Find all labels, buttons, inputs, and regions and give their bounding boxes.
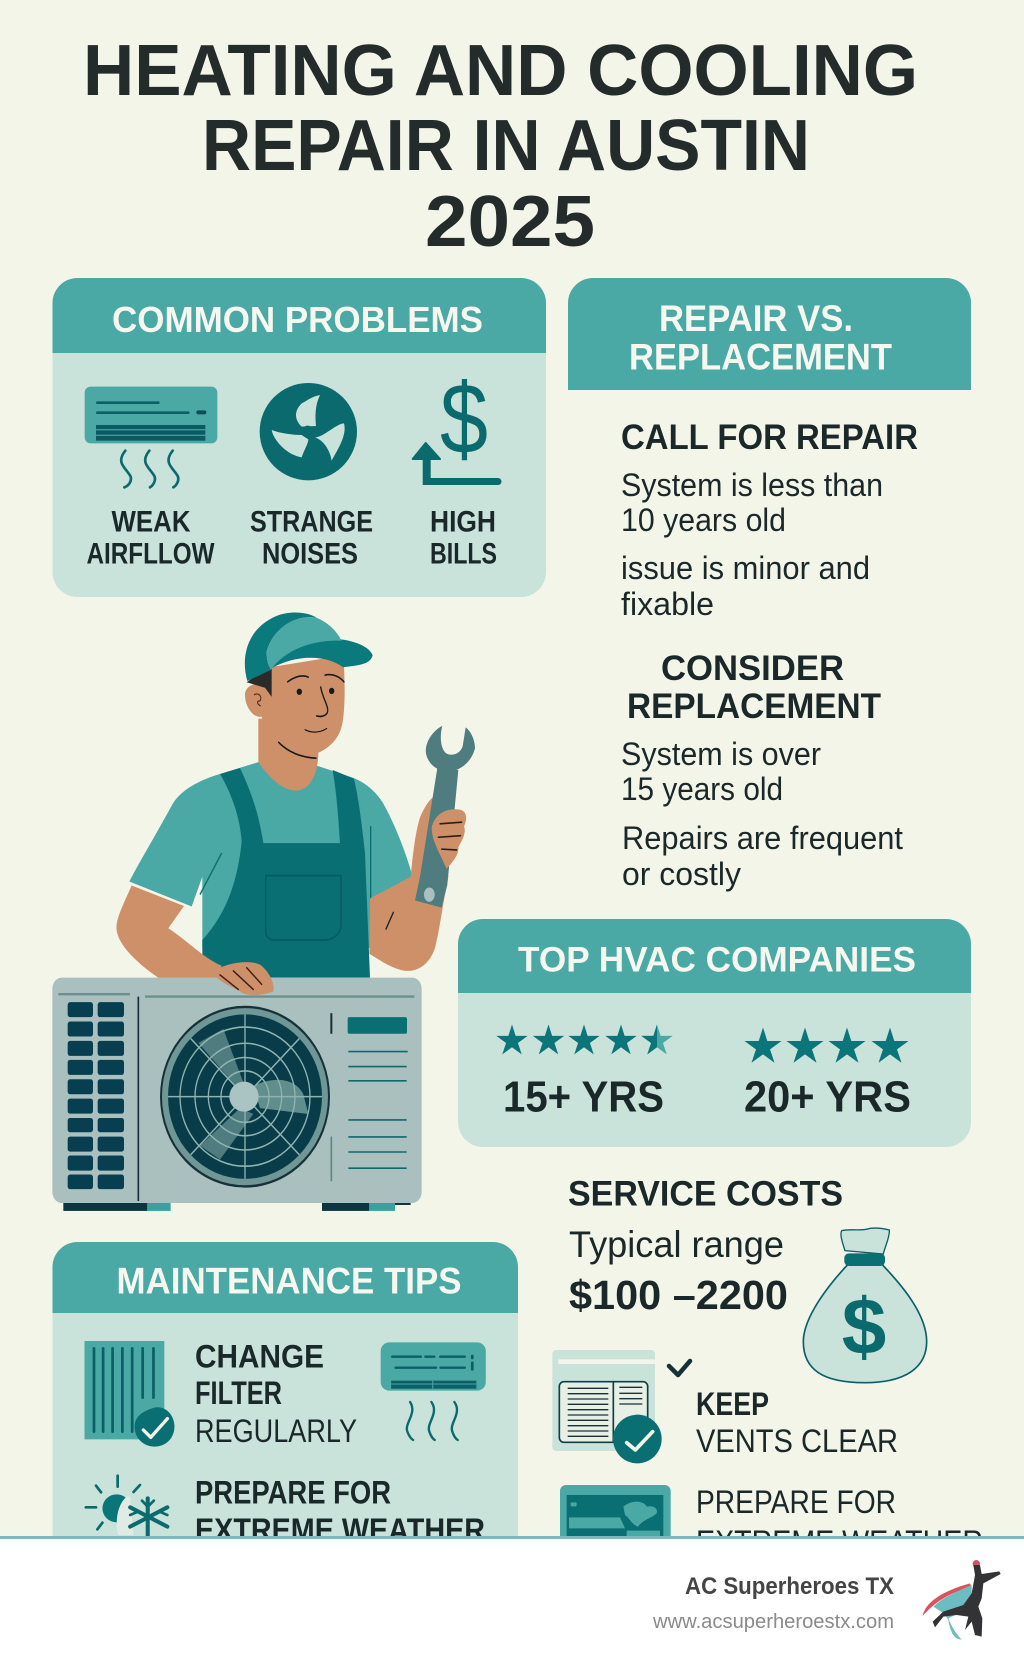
- icon: weather map card: [560, 1485, 671, 1562]
- panel: top hvac companies: [458, 919, 971, 1147]
- label: 20+ yrs: 20+ YRS: [744, 1072, 911, 1122]
- cap: [245, 612, 373, 681]
- panel: maintenance tips: [52, 1242, 518, 1560]
- footer website: www.acsuperheroestx.com: [652, 1611, 894, 1633]
- text block: consider replacement: or costly: [622, 856, 741, 892]
- heading: repair vs replacement: [629, 297, 892, 378]
- icon: wall AC with airflow: [381, 1342, 486, 1440]
- text block: prepare for extreme weather (right): PREPARE FOR: [696, 1484, 896, 1520]
- outdoor unit feet: [63, 1201, 411, 1211]
- wrench: [415, 726, 475, 908]
- label: high bills: HIGH: [430, 506, 496, 538]
- left arm: [116, 885, 222, 979]
- footer: [0, 1536, 1024, 1666]
- panel: common problems: [52, 278, 546, 597]
- text block: call for repair: 10 years old: [621, 502, 786, 538]
- text block: call for repair: CALL FOR REPAIR: [621, 418, 918, 457]
- text block: consider replacement: REPLACEMENT: [627, 687, 881, 726]
- text block: prepare for extreme weather (right): EXTREME WEATHER: [696, 1524, 983, 1560]
- heading: maintenance tips: MAINTENANCE TIPS: [116, 1260, 462, 1302]
- text block: keep vents clear: [696, 1386, 898, 1459]
- text block: service costs: [568, 1174, 843, 1318]
- hair: [247, 664, 272, 697]
- text block: change filter regularly: REGULARLY: [195, 1413, 357, 1449]
- heading: common problems: COMMON PROBLEMS: [112, 299, 483, 340]
- fingers: [432, 809, 466, 869]
- ear line: [254, 694, 261, 706]
- hand resting on unit: [213, 962, 274, 995]
- text block: keep vents clear: VENTS CLEAR: [696, 1423, 898, 1459]
- label: strange noises: [250, 506, 373, 570]
- illustration: technician with wrench: [52, 612, 475, 1211]
- overalls: [202, 768, 370, 978]
- heading: repair vs replacement: REPAIR VS.: [659, 297, 853, 339]
- unit fan: [160, 1006, 330, 1188]
- panel: repair vs replacement: [568, 278, 971, 390]
- right arm and hand: [369, 796, 448, 971]
- text block: call for repair: fixable: [621, 586, 714, 622]
- icon: vents checklist: [552, 1350, 662, 1463]
- icon: dollar with rising arrow: $: [440, 363, 488, 475]
- label: high bills: BILLS: [430, 538, 497, 570]
- face details: [279, 675, 344, 758]
- label: strange noises: NOISES: [262, 538, 358, 570]
- title: REPAIR IN AUSTIN: [202, 106, 810, 186]
- head: [245, 655, 345, 756]
- label: weak airflow: AIRFLLOW: [86, 538, 215, 570]
- overalls pocket: [266, 876, 341, 940]
- heading: repair vs replacement: REPLACEMENT: [629, 336, 892, 378]
- heading: top hvac companies: TOP HVAC COMPANIES: [518, 940, 916, 980]
- neck: [258, 719, 318, 791]
- label: high bills: [430, 506, 497, 570]
- text block: consider replacement: Repairs are frequent: [622, 820, 903, 856]
- label: weak airflow: WEAK: [112, 506, 191, 538]
- icon: air filter with check: [85, 1341, 174, 1447]
- text block: keep vents clear: KEEP: [696, 1386, 769, 1422]
- title: 2025: [425, 182, 595, 262]
- text block: service costs: SERVICE COSTS: [568, 1174, 843, 1214]
- text block: prepare for extreme weather (left): PREPARE FOR: [195, 1474, 391, 1510]
- text block: service costs: Typical range: [569, 1224, 784, 1265]
- footer brand name: AC Superheroes TX: [685, 1573, 894, 1600]
- unit control panel and grille lines: [331, 1013, 408, 1181]
- text block: call for repair: [621, 418, 918, 622]
- title: HEATING AND COOLING: [83, 31, 918, 111]
- text block: prepare for extreme weather (right): [696, 1484, 983, 1560]
- label: strange noises: STRANGE: [250, 506, 373, 538]
- icon: sun and snowflake: [86, 1476, 167, 1540]
- text block: change filter regularly: CHANGE: [195, 1338, 324, 1374]
- text block: consider replacement: System is over: [621, 736, 821, 772]
- text block: service costs: $100 –2200: [569, 1272, 788, 1318]
- text block: call for repair: System is less than: [621, 467, 883, 503]
- outdoor unit casing: [52, 978, 422, 1203]
- icon: dollar with rising arrow: [413, 363, 502, 485]
- icon: money bag: [803, 1228, 927, 1383]
- text block: consider replacement: 15 years old: [621, 771, 783, 807]
- icon: fan strange noises: [260, 383, 357, 480]
- icon: money bag: $: [842, 1282, 886, 1371]
- stars: four and a half: [496, 1024, 673, 1054]
- text block: change filter regularly: FILTER: [195, 1375, 282, 1411]
- title: [83, 31, 918, 262]
- text block: prepare for extreme weather (left): [195, 1474, 485, 1548]
- shirt: [129, 762, 413, 948]
- icon: wall AC with weak airflow: [85, 387, 217, 487]
- logo: flying superhero: [923, 1560, 1001, 1639]
- text block: call for repair: issue is minor and: [621, 550, 870, 586]
- text block: consider replacement: [621, 649, 903, 892]
- stars: four: [744, 1028, 909, 1063]
- sleeve creases: [200, 826, 371, 899]
- text block: consider replacement: CONSIDER: [661, 649, 844, 688]
- label: weak airflow: [86, 506, 215, 570]
- unit side vents: [68, 1002, 124, 1189]
- text block: prepare for extreme weather (left): EXTREME WEATHER: [195, 1512, 485, 1548]
- text block: change filter regularly: [195, 1338, 357, 1449]
- label: 15+ yrs: 15+ YRS: [503, 1072, 664, 1122]
- icon: small check mark: [669, 1361, 690, 1375]
